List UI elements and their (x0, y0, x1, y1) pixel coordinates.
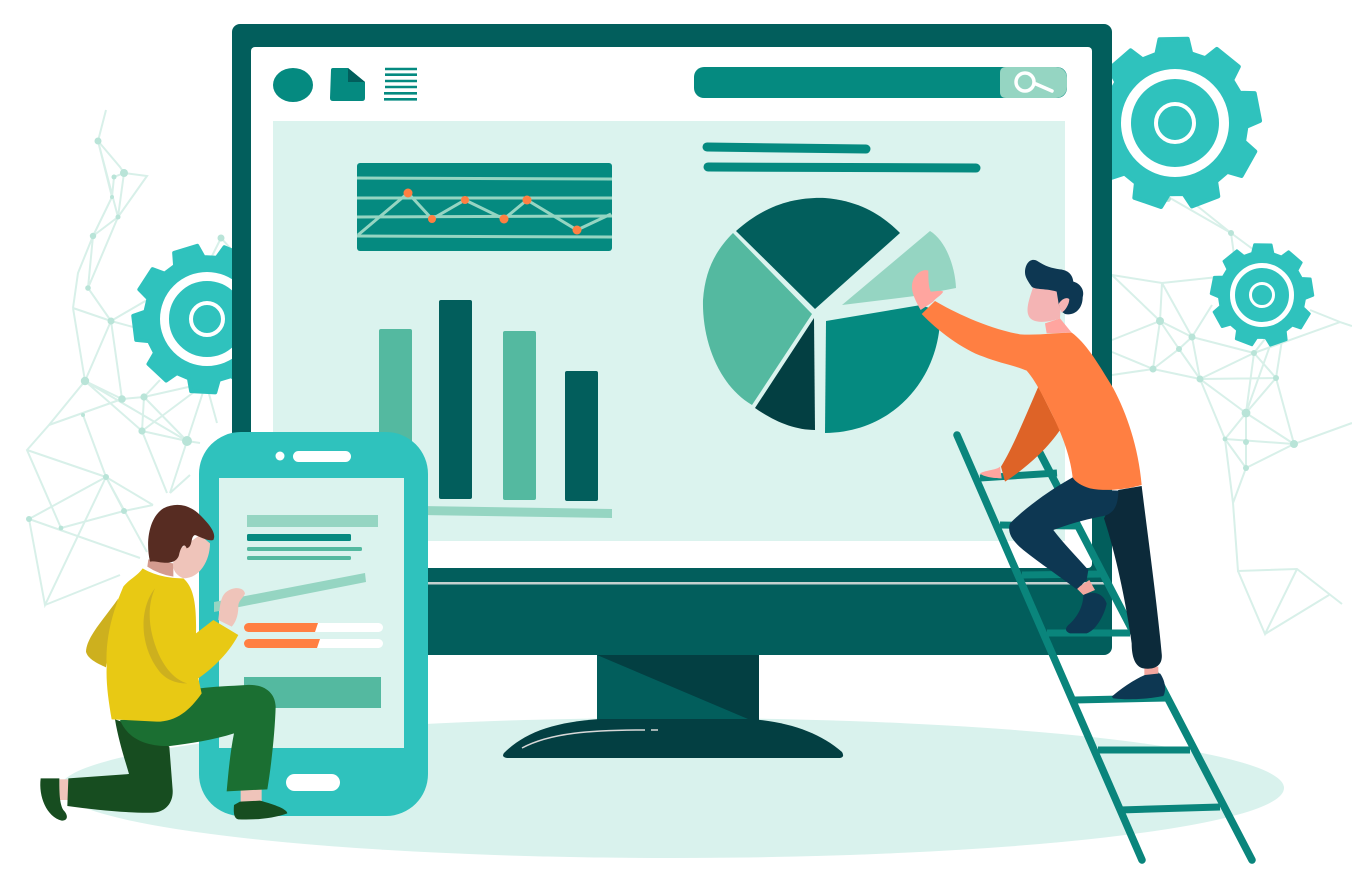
monitor stand (503, 650, 843, 758)
ladder (957, 435, 1252, 860)
person: kneeling man (40, 505, 287, 821)
toolbar icons (273, 68, 417, 102)
search bar (694, 67, 1067, 98)
monitor frame (232, 24, 1112, 655)
gear: small right (1205, 237, 1320, 353)
network: right (1112, 196, 1352, 634)
person: climbing man (912, 260, 1165, 699)
phone (199, 432, 428, 816)
line chart panel (357, 163, 612, 251)
gear: top right (1077, 24, 1273, 222)
heading lines (707, 147, 976, 168)
gear: left (119, 231, 295, 408)
pie chart (703, 198, 956, 433)
network: left (26, 110, 232, 605)
ground ellipse (60, 718, 1284, 858)
bar chart (379, 300, 612, 518)
